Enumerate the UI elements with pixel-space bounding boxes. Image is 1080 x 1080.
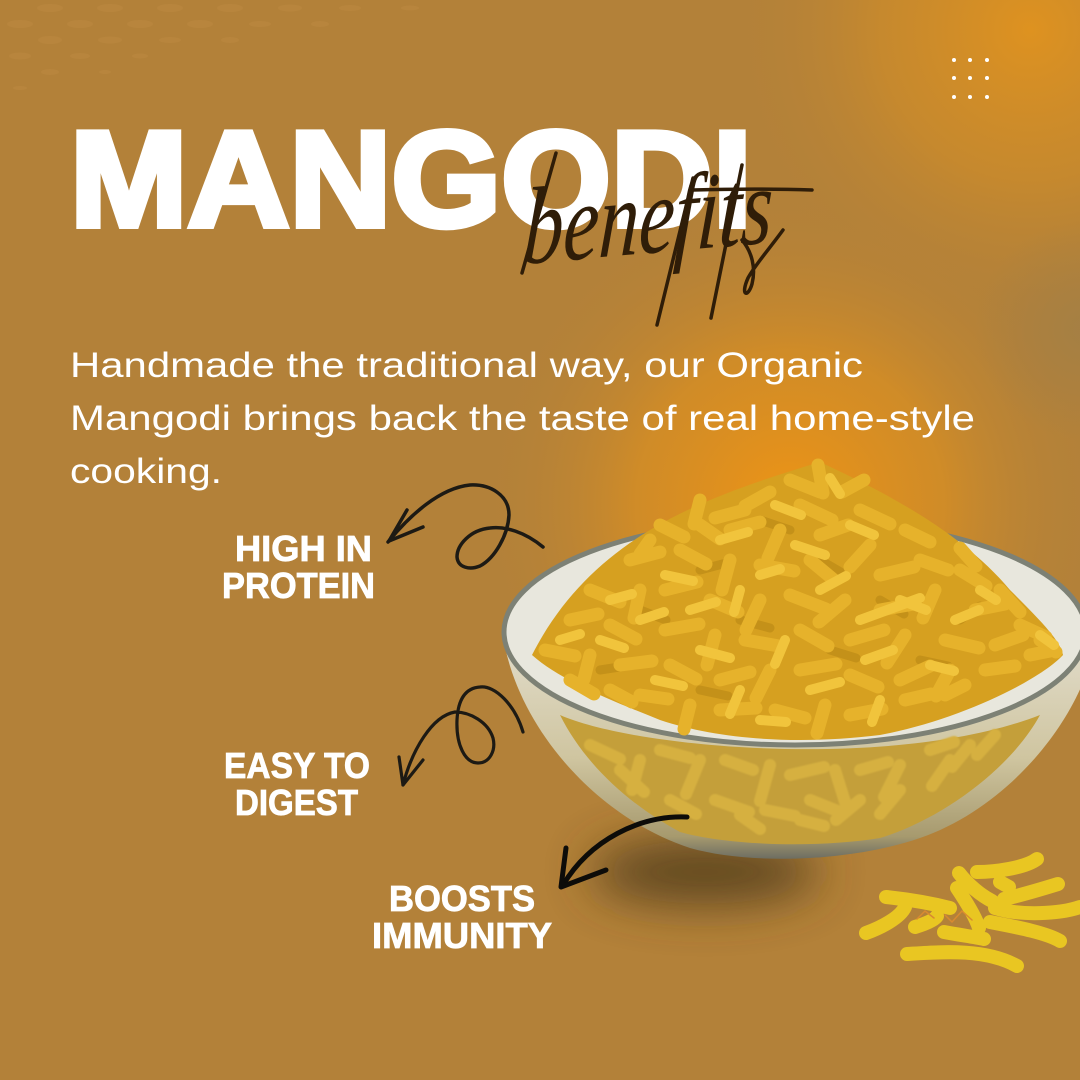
contents seen through glass	[560, 715, 1040, 844]
halftone pattern top left	[7, 4, 419, 90]
label: boosts immunity: BOOSTS	[389, 878, 535, 919]
arrow: to easy to digest	[399, 687, 523, 785]
description text	[70, 346, 975, 491]
bowl interior	[505, 520, 1080, 744]
description text: Handmade the traditional way, our Organic	[70, 346, 863, 385]
label: easy to digest: EASY TO	[224, 745, 370, 786]
label: boosts immunity	[372, 878, 552, 956]
description text: cooking.	[70, 452, 222, 491]
label: boosts immunity: IMMUNITY	[372, 915, 552, 956]
glass bowl body	[503, 635, 1080, 859]
script subtitle: benefits: benefits	[521, 146, 776, 289]
label: high in protein: PROTEIN	[222, 565, 375, 606]
mangodi mound	[532, 462, 1063, 740]
label: high in protein	[222, 528, 375, 606]
label: high in protein: HIGH IN	[235, 528, 372, 569]
bowl shadow	[590, 840, 820, 904]
arrow: to boosts immunity	[561, 817, 687, 887]
bowl with mangodi	[503, 462, 1080, 859]
label: easy to digest: DIGEST	[235, 782, 358, 823]
glass rim	[504, 519, 1080, 745]
description text: Mangodi brings back the taste of real home-style	[70, 399, 975, 438]
title: MANGODI	[70, 103, 752, 255]
arrow: to high in protein	[388, 485, 543, 568]
loose mangodi sticks	[866, 859, 1080, 966]
label: easy to digest	[224, 745, 370, 823]
dot grid decoration	[952, 58, 989, 99]
